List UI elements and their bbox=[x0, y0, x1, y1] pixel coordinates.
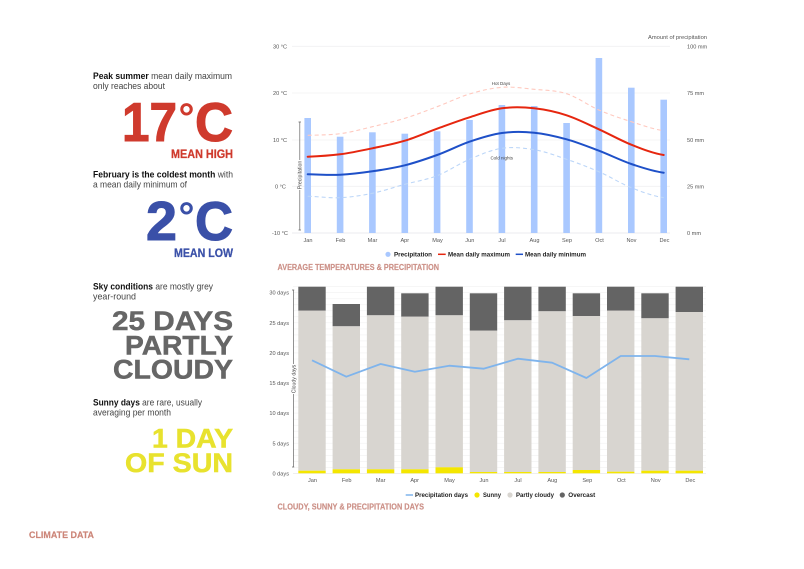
stat: 25 days partly cloudy: CLOUDY bbox=[113, 354, 233, 384]
stat: 2°C: ° bbox=[178, 195, 194, 239]
legend: days chart: Overcast bbox=[568, 492, 595, 499]
stat: 25 days partly cloudy: 25 DAYS bbox=[112, 306, 233, 336]
text: mean daily minimum: a mean daily minimum of bbox=[93, 180, 187, 190]
legend: temperature chart: Mean daily minimum bbox=[525, 251, 586, 258]
legend: days chart bbox=[406, 492, 595, 499]
month labels: Jul bbox=[498, 238, 506, 244]
month labels: Aug bbox=[530, 238, 539, 244]
month labels: Dec bbox=[685, 478, 695, 484]
text: averaging per month: averaging per month bbox=[93, 408, 171, 418]
day axis labels: 10 days bbox=[269, 411, 289, 417]
stat: 25 days partly cloudy: PARTLY bbox=[125, 330, 233, 360]
day axis labels bbox=[269, 291, 289, 477]
axis bracket: precipitation: Precipitation bbox=[298, 161, 304, 189]
stat: 17°C bbox=[122, 91, 233, 153]
month labels: Apr bbox=[410, 478, 419, 484]
right precipitation axis labels: 100 mm bbox=[687, 44, 708, 50]
stacked bars: overcast bbox=[298, 287, 703, 331]
legend: temperature chart bbox=[385, 251, 586, 258]
stat: 17°C: 17 bbox=[122, 91, 177, 153]
dashed line: hot days bbox=[308, 87, 664, 135]
legend: days chart: Partly cloudy bbox=[516, 492, 555, 499]
stat: 2°C: 2 bbox=[146, 190, 177, 252]
panel: key temperature and sky facts bbox=[93, 71, 233, 478]
footer title: climate data: CLIMATE DATA bbox=[29, 530, 94, 540]
stat: 25 days partly cloudy bbox=[112, 306, 233, 384]
precipitation bars bbox=[304, 58, 667, 233]
legend: temperature chart: Mean daily maximum bbox=[448, 251, 510, 258]
month labels: Mar bbox=[368, 238, 377, 244]
month labels: May bbox=[444, 478, 455, 484]
line: mean daily minimum bbox=[308, 132, 664, 175]
legend: days chart: Sunny bbox=[483, 492, 502, 499]
month labels: Feb bbox=[336, 238, 345, 244]
day axis labels: 20 days bbox=[269, 351, 289, 357]
left temperature axis labels bbox=[272, 44, 288, 237]
day axis labels: 30 days bbox=[269, 291, 289, 297]
month labels: Sep bbox=[582, 478, 592, 484]
dashed line: cold nights bbox=[308, 148, 664, 198]
annotation: hot days: Hot Days bbox=[492, 81, 511, 86]
day axis labels: 25 days bbox=[269, 321, 289, 327]
month labels bbox=[308, 478, 695, 484]
day axis labels: 15 days bbox=[269, 381, 289, 387]
month labels: May bbox=[432, 238, 443, 244]
month labels: Mar bbox=[376, 478, 386, 484]
left temperature axis labels: 0 °C bbox=[275, 184, 286, 190]
line: mean daily maximum bbox=[308, 107, 664, 157]
stat: 1 day of sun: OF SUN bbox=[125, 448, 233, 478]
text: only reaches about: only reaches about bbox=[93, 81, 165, 91]
left temperature axis labels: 20 °C bbox=[273, 91, 287, 97]
left temperature axis labels: 10 °C bbox=[273, 138, 287, 144]
month labels: Jan bbox=[308, 478, 317, 484]
axis bracket: precipitation bbox=[298, 122, 304, 230]
right precipitation axis labels: 50 mm bbox=[687, 138, 704, 144]
stat: 17°C: C bbox=[195, 91, 233, 153]
stat: 2°C: C bbox=[195, 190, 233, 252]
chart: average temperatures and precipitation bbox=[272, 35, 708, 272]
month labels: Nov bbox=[627, 238, 637, 244]
right precipitation axis labels: Amount of precipitation bbox=[648, 35, 707, 41]
stat label: mean low: MEAN LOW bbox=[174, 248, 233, 260]
month labels: Jun bbox=[479, 478, 489, 484]
text: coldest month: February is the coldest month with bbox=[93, 170, 233, 180]
text: sky conditions: Sky conditions are mostly grey bbox=[93, 282, 213, 292]
right precipitation axis labels: 75 mm bbox=[687, 91, 704, 97]
stacked bars: partly cloudy bbox=[298, 311, 703, 472]
month labels: Nov bbox=[651, 478, 661, 484]
month labels: Sep bbox=[562, 238, 572, 244]
text: year-round: year-round bbox=[93, 292, 136, 302]
annotation: cold nights: Cold nights bbox=[490, 156, 514, 160]
month labels: Feb bbox=[342, 478, 352, 484]
stat label: mean high: MEAN HIGH bbox=[171, 149, 233, 161]
caption: temperature chart: AVERAGE TEMPERATURES & PRECIPITATION bbox=[278, 263, 439, 272]
left temperature axis labels: 30 °C bbox=[273, 44, 287, 50]
month labels: Jan bbox=[303, 238, 313, 244]
text: sunny days: Sunny days are rare, usually bbox=[93, 398, 202, 408]
stat: 2°C bbox=[146, 190, 233, 252]
stat: 1 day of sun: 1 DAY bbox=[152, 424, 233, 454]
stat: 17°C: ° bbox=[178, 96, 194, 140]
month labels: Apr bbox=[400, 238, 409, 244]
chart: cloudy, sunny and precipitation days bbox=[269, 287, 706, 512]
month labels: Jul bbox=[514, 478, 522, 484]
month labels: Aug bbox=[547, 478, 557, 484]
day axis labels: 0 days bbox=[273, 471, 289, 477]
axis bracket: cloudy days: Cloudy days bbox=[291, 364, 297, 393]
left temperature axis labels: -10 °C bbox=[272, 231, 288, 237]
month labels: Oct bbox=[617, 478, 626, 484]
month labels: Jun bbox=[465, 238, 474, 244]
caption: days chart: CLOUDY, SUNNY & PRECIPITATION DAYS bbox=[278, 502, 425, 512]
line: precipitation days bbox=[312, 356, 689, 378]
legend: days chart: Precipitation days bbox=[415, 492, 469, 499]
month labels: Oct bbox=[595, 238, 604, 244]
month labels bbox=[303, 238, 670, 244]
month labels: Dec bbox=[660, 238, 670, 244]
stat: 1 day of sun bbox=[125, 424, 233, 478]
right precipitation axis labels: 25 mm bbox=[687, 184, 704, 190]
legend: temperature chart: Precipitation bbox=[394, 251, 432, 258]
text: peak summer: Peak summer mean daily maximum bbox=[93, 71, 232, 81]
right precipitation axis labels: 0 mm bbox=[687, 231, 701, 237]
stacked bars: sunny bbox=[298, 467, 703, 473]
right precipitation axis labels bbox=[648, 35, 708, 237]
day axis labels: 5 days bbox=[273, 441, 289, 447]
